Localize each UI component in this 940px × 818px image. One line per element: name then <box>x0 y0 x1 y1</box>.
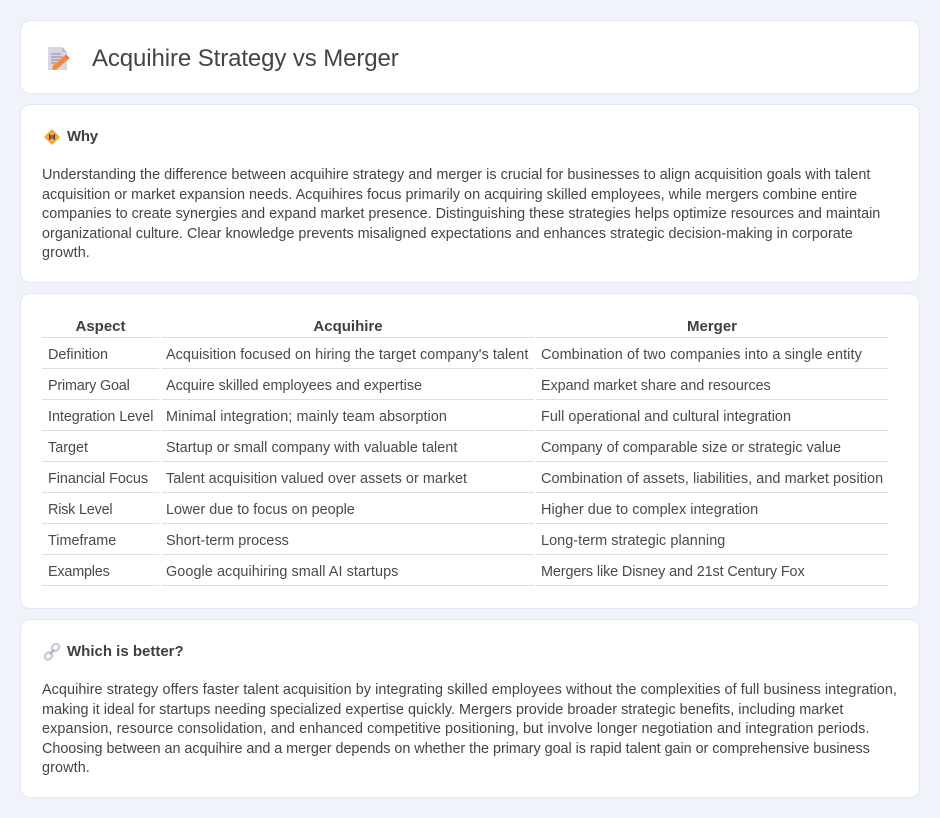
text: Full operational and cultural integration <box>541 409 791 425</box>
icon: document with pencil <box>48 47 70 70</box>
text block: which is better <box>42 682 897 776</box>
text: Target <box>48 440 88 456</box>
icon: diamond road sign <box>44 129 60 145</box>
panel: comparison table <box>20 293 920 609</box>
text: Company of comparable size or strategic value <box>541 440 841 456</box>
text: Minimal integration; mainly team absorption <box>166 409 447 425</box>
panel: header <box>20 20 920 94</box>
text: Expand market share and resources <box>541 378 771 394</box>
text: Combination of assets, liabilities, and market position <box>541 471 883 487</box>
text: Google acquihiring small AI startups <box>166 564 398 580</box>
text: Lower due to focus on people <box>166 502 355 518</box>
text: Long-term strategic planning <box>541 533 725 549</box>
panel: which is better <box>20 619 920 798</box>
text block: why: companies to create synergies and expand market presence. Distinguishing these strategies helps optimize resources and maintain <box>42 206 880 222</box>
panel: why <box>20 104 920 283</box>
text: Startup or small company with valuable talent <box>166 440 457 456</box>
table header: acquihire: Acquihire <box>313 318 383 335</box>
text: Acquire skilled employees and expertise <box>166 378 422 394</box>
text: Integration Level <box>48 409 153 425</box>
text: Definition <box>48 347 108 363</box>
text: Mergers like Disney and 21st Century Fox <box>541 564 805 580</box>
text: Financial Focus <box>48 471 148 487</box>
table header: aspect: Aspect <box>75 318 126 335</box>
text block: which is better: Acquihire strategy offers faster talent acquisition by integrating skilled employees without the complexities of full business integration, <box>42 682 897 698</box>
text block: why: organizational culture. Clear knowledge prevents misaligned expectations and enhances strategic decision-making in corporate <box>42 226 853 242</box>
text: Combination of two companies into a single entity <box>541 347 862 363</box>
text block: which is better: growth. <box>42 760 90 776</box>
text: Acquisition focused on hiring the target company's talent <box>166 347 528 363</box>
text: Timeframe <box>48 533 116 549</box>
text: Primary Goal <box>48 378 130 394</box>
text: Risk Level <box>48 502 112 518</box>
text: Short-term process <box>166 533 289 549</box>
title: Acquihire Strategy vs Merger <box>92 45 399 72</box>
text block: why: acquisition or market expansion needs. Acquihires focus primarily on acquiring skilled employees, while mergers combine entire <box>42 186 857 202</box>
text: Examples <box>48 564 110 580</box>
text: Talent acquisition valued over assets or market <box>166 471 467 487</box>
heading: why: Why <box>67 128 98 145</box>
text block: which is better: Choosing between an acquihire and a merger depends on whether the primary goal is rapid talent gain or comprehensive business <box>42 740 870 756</box>
text block: which is better: making it ideal for startups needing specialized expertise quickly. Mergers provide broader strategic benefits, including market <box>42 702 843 718</box>
text block: why: growth. <box>42 245 90 261</box>
text block: which is better: expansion, resource consolidation, and enhanced competitive positioning, but involve longer negotiation and integration periods. <box>42 721 870 737</box>
table header: merger: Merger <box>687 318 737 335</box>
text: Higher due to complex integration <box>541 502 758 518</box>
icon: chain link <box>44 643 60 661</box>
text block: why <box>42 167 880 261</box>
heading: which is better: Which is better? <box>67 643 184 660</box>
text block: why: Understanding the difference between acquihire strategy and merger is crucial for businesses to align acquisition goals with talent <box>42 167 870 183</box>
